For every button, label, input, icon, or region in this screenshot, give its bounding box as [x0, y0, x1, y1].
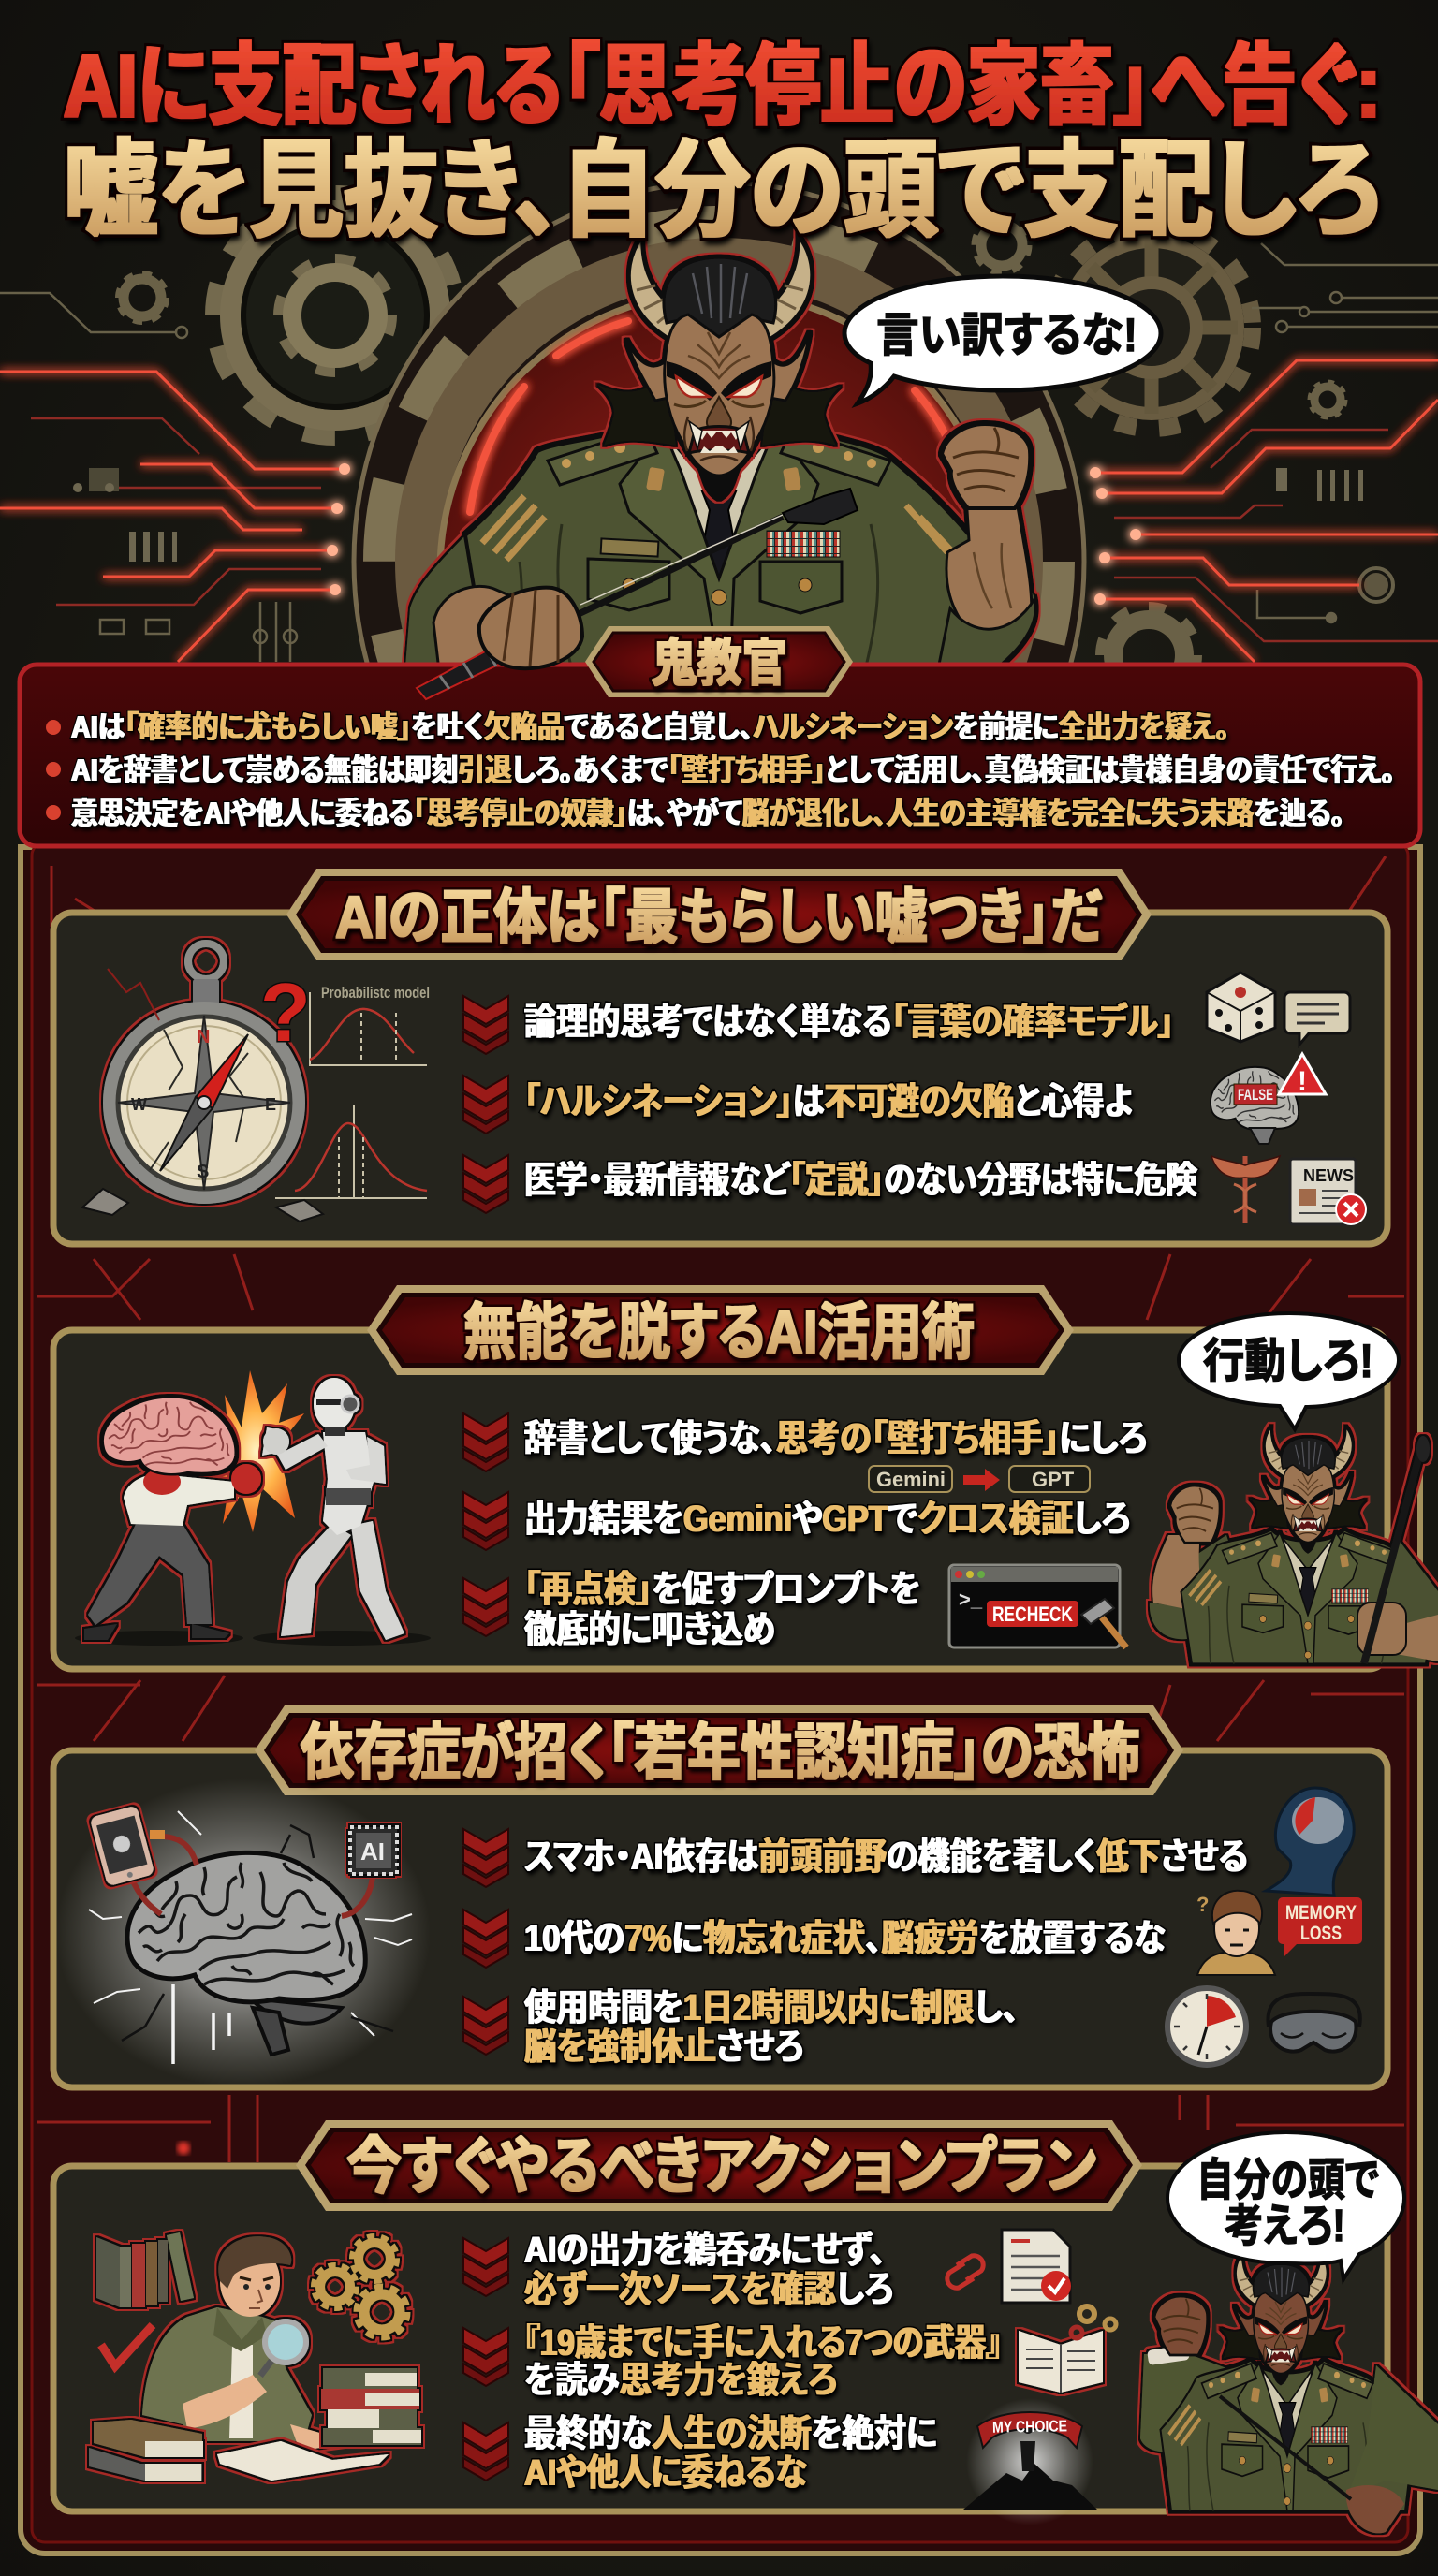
bullet 3: 意思決定をAIや他人に委ねる「思考停止の奴隷」は、やがて脳が退化し、人生の主導権を完全に失う末路を辿る。	[71, 796, 1344, 830]
panel 4 text: 『19歳までに手に入れる7つの武器』	[524, 2322, 1002, 2364]
icon: boy and memory loss: LOSS	[1300, 1923, 1342, 1944]
demon: 行動しろ	[1150, 1427, 1438, 1663]
circuit lines between panels	[37, 856, 1404, 2162]
probability graphs	[275, 992, 427, 1198]
central gear behind the instructor	[354, 183, 1084, 941]
panel 3 text: スマホ・AI依存は前頭前野の機能を著しく低下させる	[524, 1837, 1248, 1878]
bubble: 自分の頭で考えろ!: 考えろ!	[1225, 2202, 1345, 2251]
icon: open book with gears	[1019, 2306, 1116, 2393]
check mark	[101, 2325, 153, 2366]
panel 4 text: 必ず一次ソースを確認しろ	[524, 2269, 893, 2310]
icon: timer and sleep mask	[1167, 1988, 1360, 2065]
neon red traces	[0, 360, 1438, 662]
thin dim red traces	[31, 418, 1438, 641]
banner 4: 今すぐやるべきアクションプラン	[346, 2131, 1096, 2201]
panel 4 text: AIの出力を鵜呑みにせず、	[524, 2230, 886, 2271]
gears	[314, 2236, 407, 2337]
illustration: overloaded brain	[66, 1787, 421, 2079]
gear: right spoked	[1050, 227, 1253, 429]
compass illustration: W	[131, 1095, 147, 1114]
icon: caduceus and news	[1211, 1156, 1366, 1224]
chevron bullets	[463, 996, 508, 2481]
bubble: 自分の頭で考えろ!	[1167, 2132, 1404, 2279]
left stack	[94, 2420, 202, 2457]
compass illustration	[82, 944, 430, 1222]
icon: boy and memory loss	[1196, 1891, 1362, 1975]
panel 3 text: 脳を強制休止させろ	[524, 2027, 803, 2068]
mini cards: Gemini to GPT	[869, 1466, 1090, 1492]
panel 4: アクションプラン	[53, 2120, 1387, 2511]
banner 1: AIの正体は「最もらしい嘘つき」だ	[335, 884, 1102, 951]
cracks	[89, 1811, 412, 2036]
banner 3: 依存症が招く「若年性認知症」の恐怖	[301, 1718, 1140, 1787]
icon: caduceus and news: NEWS	[1303, 1166, 1354, 1185]
compass illustration: Probabilistc model	[321, 984, 430, 1002]
frame: lower red area	[21, 847, 1420, 2554]
icon: boy and memory loss: MEMORY	[1285, 1902, 1357, 1924]
mini cards: Gemini to GPT: GPT	[1032, 1468, 1075, 1491]
question mark: ?	[260, 966, 311, 1059]
panel 4 text	[524, 2230, 1002, 2494]
icon: false brain warning: FALSE	[1238, 1086, 1273, 1104]
panel 3 text	[524, 1837, 1248, 2068]
decorative inner frame	[32, 842, 1408, 2542]
robot	[281, 1524, 351, 1636]
tan circuit traces	[0, 243, 1438, 662]
icon: brain scan head	[1266, 1788, 1354, 1895]
banner 2	[367, 1285, 1074, 1375]
panel 4 text: 最終的な人生の決断を絶対に	[524, 2413, 937, 2454]
body and arms	[404, 423, 1035, 679]
panel 1 text: 論理的思考ではなく単なる「言葉の確率モデル」	[524, 1001, 1174, 1043]
gear: large left	[217, 198, 453, 433]
speech bubble: 言い訳するな!: 言い訳するな!	[876, 309, 1137, 361]
icon: my choice: MY CHOICE	[992, 2417, 1067, 2437]
compass illustration: E	[265, 1095, 276, 1114]
icon: phone connected to brain	[90, 1805, 197, 1914]
small gears	[118, 218, 1345, 704]
icon: false brain warning	[1211, 1054, 1326, 1144]
terminal: recheck: RECHECK	[992, 1603, 1073, 1626]
name badge: 鬼教官	[585, 626, 853, 697]
illustration: researcher with books	[89, 2232, 421, 2481]
bubble: 自分の頭で考えろ!: 自分の頭で	[1196, 2156, 1379, 2205]
demon: 自分の頭で考えろ	[1140, 2254, 1438, 2533]
upright books	[96, 2237, 120, 2307]
compass illustration: S	[197, 1162, 209, 1182]
red summary panel	[20, 665, 1420, 846]
banner 1	[286, 869, 1152, 960]
person	[88, 1518, 212, 1625]
panel 1 text: 医学・最新情報など「定説」のない分野は特に危険	[524, 1160, 1197, 1201]
name badge: 鬼教官: 鬼教官	[652, 636, 787, 692]
panel 2 text	[524, 1418, 1147, 1650]
icon: AI chip	[342, 1827, 397, 1916]
mini cards: Gemini to GPT: Gemini	[876, 1468, 946, 1491]
panel 2 text: 「再点検」を促すプロンプトを	[524, 1569, 920, 1610]
banner 2: 無能を脱するAI活用術	[463, 1297, 975, 1367]
whip and gripping hand	[417, 489, 858, 699]
icon: link and checked document	[947, 2230, 1071, 2303]
bubble: 行動しろ!	[1179, 1313, 1399, 1429]
compass illustration: N	[197, 1027, 210, 1047]
right stack	[323, 2368, 417, 2391]
panel 3 text: 使用時間を1日2時間以内に制限し、	[524, 1987, 1019, 2028]
panel 2 text: 辞書として使うな、思考の「壁打ち相手」にしろ	[524, 1418, 1147, 1459]
bullet 1: AIは「確率的に尤もらしい嘘」を吐く欠陥品であると自覚し、ハルシネーションを前提に全出力を疑え。	[71, 710, 1229, 744]
panel 4 text: AIや他人に委ねるな	[524, 2452, 807, 2494]
hero background: gears and circuits	[0, 183, 1438, 941]
icon: my choice	[963, 2398, 1097, 2525]
panel 3: 若年性認知症	[53, 1705, 1387, 2087]
man	[142, 2307, 312, 2441]
icon: false brain warning: !	[1298, 1066, 1307, 1097]
terminal: recheck: >_	[959, 1588, 983, 1611]
icon: dice and speech	[1207, 973, 1350, 1045]
head	[596, 237, 842, 500]
illustration: brain boxing a robot	[75, 1370, 431, 1646]
icon: AI chip: AI	[360, 1837, 385, 1866]
spark burst	[208, 1370, 304, 1532]
icon: boy and memory loss: ?	[1196, 1893, 1209, 1916]
open book	[217, 2441, 389, 2481]
banner 4	[296, 2120, 1142, 2211]
banner 3	[255, 1705, 1183, 1795]
terminal: recheck	[949, 1565, 1126, 1647]
bubble: 行動しろ!: 行動しろ!	[1203, 1335, 1373, 1387]
hero instructor	[404, 237, 1035, 679]
speech bubble: 言い訳するな!	[844, 276, 1161, 403]
panel 4 text: を読み思考力を鍛えろ	[524, 2360, 837, 2401]
panel 1 text: 「ハルシネーション」は不可避の欠陥と心得よ	[524, 1081, 1133, 1122]
panel 2: 活用術	[53, 1285, 1387, 1669]
panel 3 text: 10代の7%に物忘れ症状、脳疲労を放置するな	[524, 1918, 1166, 1959]
panel 2 text: 徹底的に叩き込め	[524, 1609, 775, 1650]
panel 2 text: 出力結果をGeminiやGPTでクロス検証しろ	[524, 1499, 1130, 1540]
panel 1: AIの正体	[53, 869, 1387, 1244]
panel 1 text	[524, 1001, 1197, 1201]
